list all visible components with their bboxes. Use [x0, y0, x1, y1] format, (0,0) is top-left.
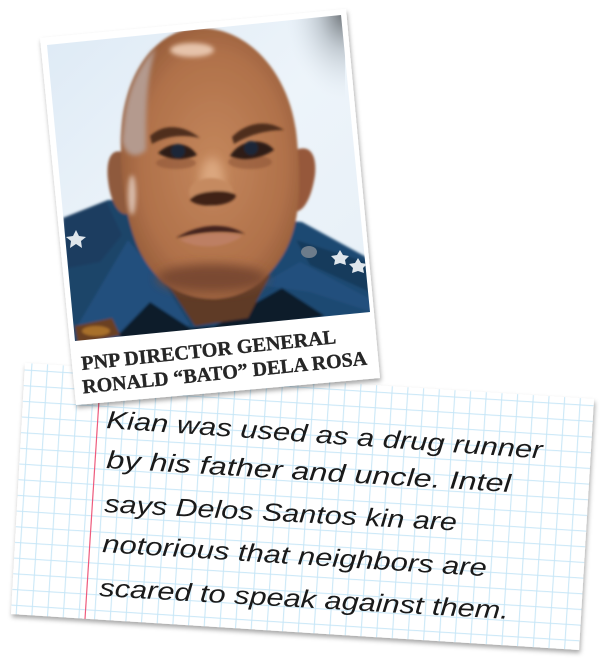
- face features: [150, 124, 284, 246]
- handwritten note text: notorious that neighbors are: [102, 530, 488, 582]
- dark collar opening: [118, 288, 324, 336]
- ears: [108, 151, 128, 214]
- panel: polaroid photo card: [30, 5, 380, 405]
- uniform: [60, 200, 200, 345]
- collar pin: [75, 318, 120, 345]
- handwritten note text: [99, 406, 546, 625]
- handwritten note text: Kian was used as a drug runner: [106, 406, 546, 465]
- head: [121, 28, 299, 299]
- panel: graph paper note: [11, 363, 594, 650]
- handwritten note text: by his father and uncle. Intel: [106, 446, 513, 498]
- highlights and shadow: [122, 48, 156, 155]
- photo: portrait of Dela Rosa: [47, 15, 370, 341]
- photo caption: RONALD “BATO” DELA ROSA: [81, 348, 369, 398]
- handwritten note text: scared to speak against them.: [99, 574, 510, 625]
- red margin line: [85, 400, 99, 619]
- photo caption: PNP DIRECTOR GENERAL: [80, 326, 337, 375]
- handwritten note text: says Delos Santos kin are: [104, 490, 458, 536]
- neck: [165, 275, 270, 326]
- shoulder stars: [66, 230, 367, 273]
